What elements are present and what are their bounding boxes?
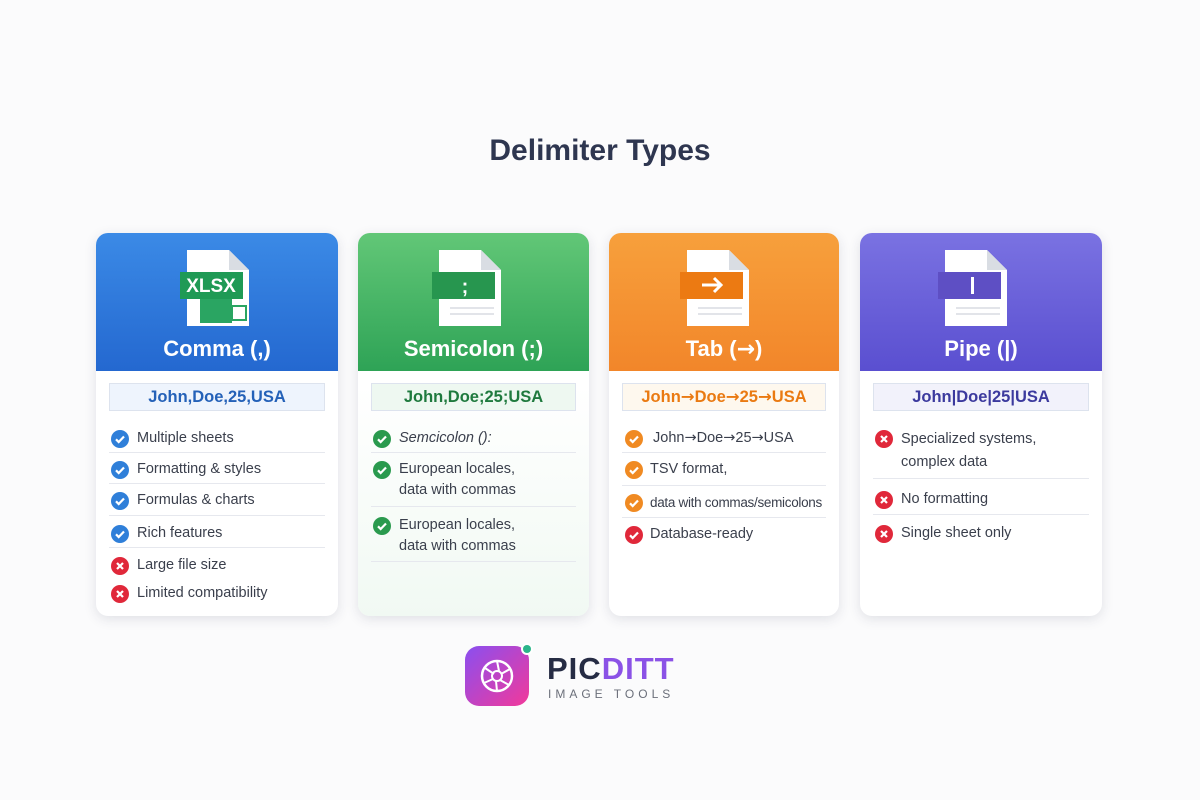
code sample: comma: John,Doe,25,USA: [148, 388, 286, 406]
panel: semicolon: Semcicolon ():: [399, 430, 492, 446]
code sample: comma: [109, 383, 325, 411]
icon: semicolon file: [432, 250, 501, 326]
panel: semicolon: data with commas: [399, 482, 516, 498]
header: tab: [609, 233, 839, 371]
panel: comma: Formatting & styles: [137, 461, 261, 477]
panel: tab: John→Doe→25→USA: [653, 430, 794, 446]
list: tab: [622, 430, 826, 544]
panel: semicolon: European locales,: [399, 517, 515, 533]
header: semicolon: [358, 233, 589, 371]
icon: semicolon file: ;: [462, 276, 468, 298]
icon: xlsx file: XLSX: [186, 276, 236, 297]
code sample: tab: John→Doe→25→USA: [641, 387, 807, 406]
panel: pipe: No formatting: [901, 491, 988, 507]
panel: comma: [96, 233, 338, 616]
panel: comma: Large file size: [137, 557, 226, 573]
panel: semicolon: European locales,: [399, 461, 515, 477]
panel: pipe: complex data: [901, 454, 987, 470]
code sample: pipe: [873, 383, 1089, 411]
header: semicolon: Semicolon (;): [404, 336, 543, 361]
header: comma: [96, 233, 338, 371]
panel: comma: Formulas & charts: [137, 492, 255, 508]
code sample: semicolon: John,Doe;25;USA: [404, 388, 543, 406]
tagline: IMAGE TOOLS: [548, 687, 674, 701]
panel: semicolon: data with commas: [399, 538, 516, 554]
panel: tab: data with commas/semicolons: [650, 495, 822, 510]
panel: tab: [609, 233, 839, 616]
code sample: pipe: John|Doe|25|USA: [912, 388, 1050, 406]
header: pipe: [860, 233, 1102, 371]
wordmark: PICDITT: [547, 651, 675, 686]
panel: pipe: Single sheet only: [901, 525, 1011, 541]
title: Delimiter Types: [489, 134, 711, 167]
panel: comma: Limited compatibility: [137, 585, 268, 601]
logo: picditt: [465, 645, 675, 706]
panel: semicolon: [358, 233, 589, 616]
icon: pipe file: [938, 250, 1007, 326]
icon: xlsx file: [180, 250, 249, 326]
panel: comma: Multiple sheets: [137, 430, 234, 446]
panel: comma: Rich features: [137, 525, 222, 541]
icon: tab file: [680, 250, 749, 326]
panel: pipe: Specialized systems,: [901, 431, 1036, 447]
list: semicolon: [371, 430, 576, 562]
header: pipe: Pipe (|): [944, 336, 1018, 361]
panel: pipe: [860, 233, 1102, 616]
code sample: semicolon: [371, 383, 576, 411]
icon: camera aperture: [465, 645, 531, 706]
list: comma: [109, 430, 325, 603]
panel: tab: Database-ready: [650, 526, 753, 542]
code sample: tab: [622, 383, 826, 411]
panel: tab: TSV format,: [650, 461, 727, 477]
header: tab: Tab (→): [686, 336, 762, 362]
list: pipe: [873, 430, 1089, 543]
header: comma: Comma (,): [163, 336, 271, 361]
